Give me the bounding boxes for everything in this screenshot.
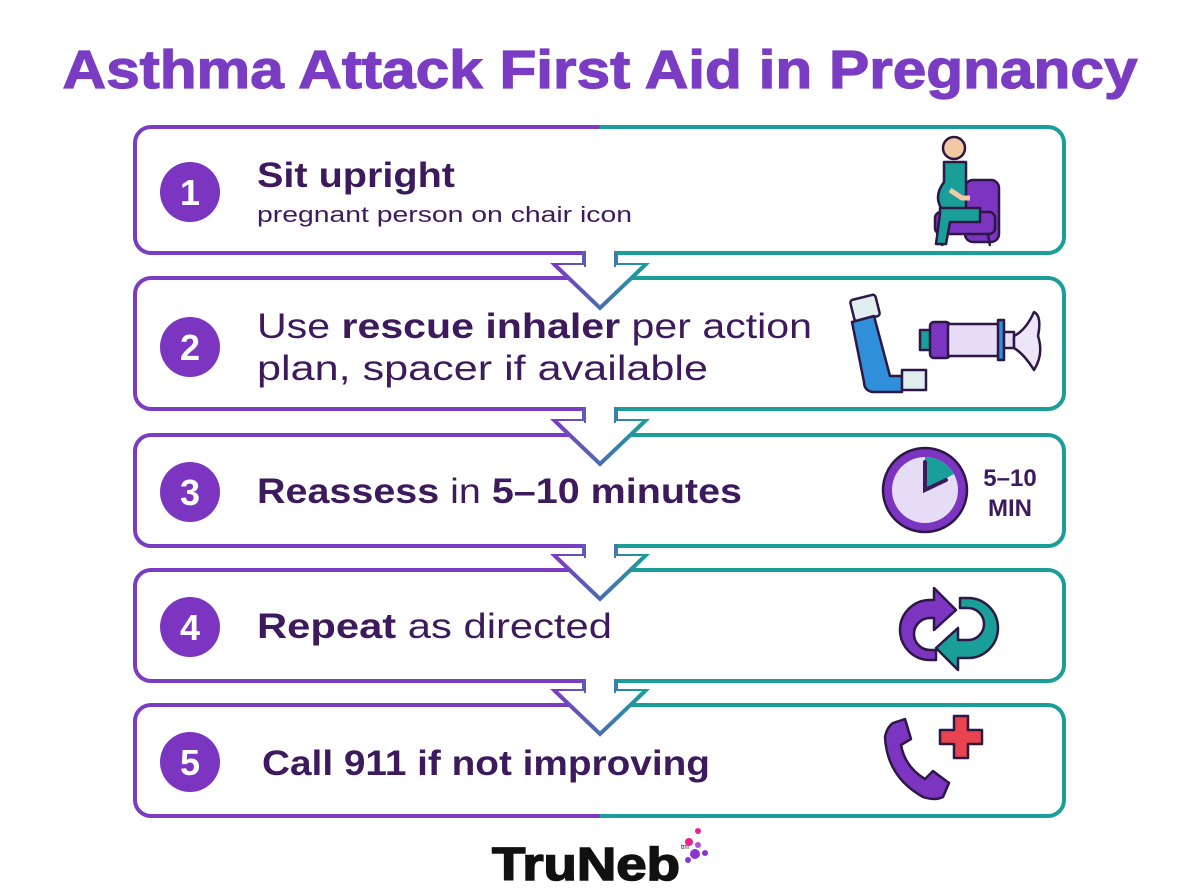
text: rescue inhaler (257, 307, 812, 388)
arrow 3 to 4 (555, 544, 645, 599)
arrow 4 to 5 (555, 679, 645, 734)
arrow 1 to 2 (555, 251, 645, 308)
number 4: 4 (180, 607, 200, 648)
logo: TruNeb (492, 828, 708, 890)
title: Asthma Attack First Aid in Pregnancy (62, 40, 1138, 100)
panel: step 2 (135, 265, 1064, 409)
icon: inhaler and spacer (850, 294, 1040, 392)
icon: clock: 5–10 (983, 465, 1037, 492)
text: sit upright: pregnant person on chair icon (257, 202, 632, 227)
icon: phone and cross (885, 716, 982, 799)
text: reassess: Reassess in 5–10 minutes (257, 472, 742, 511)
text: sit upright (257, 156, 632, 227)
panel: step 5 (135, 691, 1064, 816)
number 1: 1 (180, 172, 200, 213)
icon: pregnant person on chair (935, 137, 999, 246)
number 3: 3 (180, 472, 200, 513)
number 1 (160, 162, 220, 222)
panel: step 4 (135, 556, 1064, 681)
icon: repeat arrows (900, 588, 998, 670)
logo: TruNeb: TruNeb (492, 838, 680, 890)
text: repeat: Repeat as directed (257, 607, 612, 646)
icon: clock (883, 448, 1037, 532)
number 4 (160, 597, 220, 657)
arrow 2 to 3 (555, 407, 645, 464)
number 5 (160, 732, 220, 792)
number 3 (160, 462, 220, 522)
number 5: 5 (180, 742, 200, 783)
logo: TruNeb: tm (681, 844, 689, 851)
icon: clock: MIN (988, 495, 1032, 522)
number 2 (160, 317, 220, 377)
text: rescue inhaler: Use rescue inhaler per action (257, 307, 812, 346)
panel: step 3 (135, 421, 1064, 546)
text: sit upright: Sit upright (257, 156, 455, 195)
text: rescue inhaler: plan, spacer if available (257, 349, 708, 388)
panel: step 1 (135, 127, 1064, 253)
number 2: 2 (180, 327, 200, 368)
text: call 911: Call 911 if not improving (262, 744, 710, 783)
